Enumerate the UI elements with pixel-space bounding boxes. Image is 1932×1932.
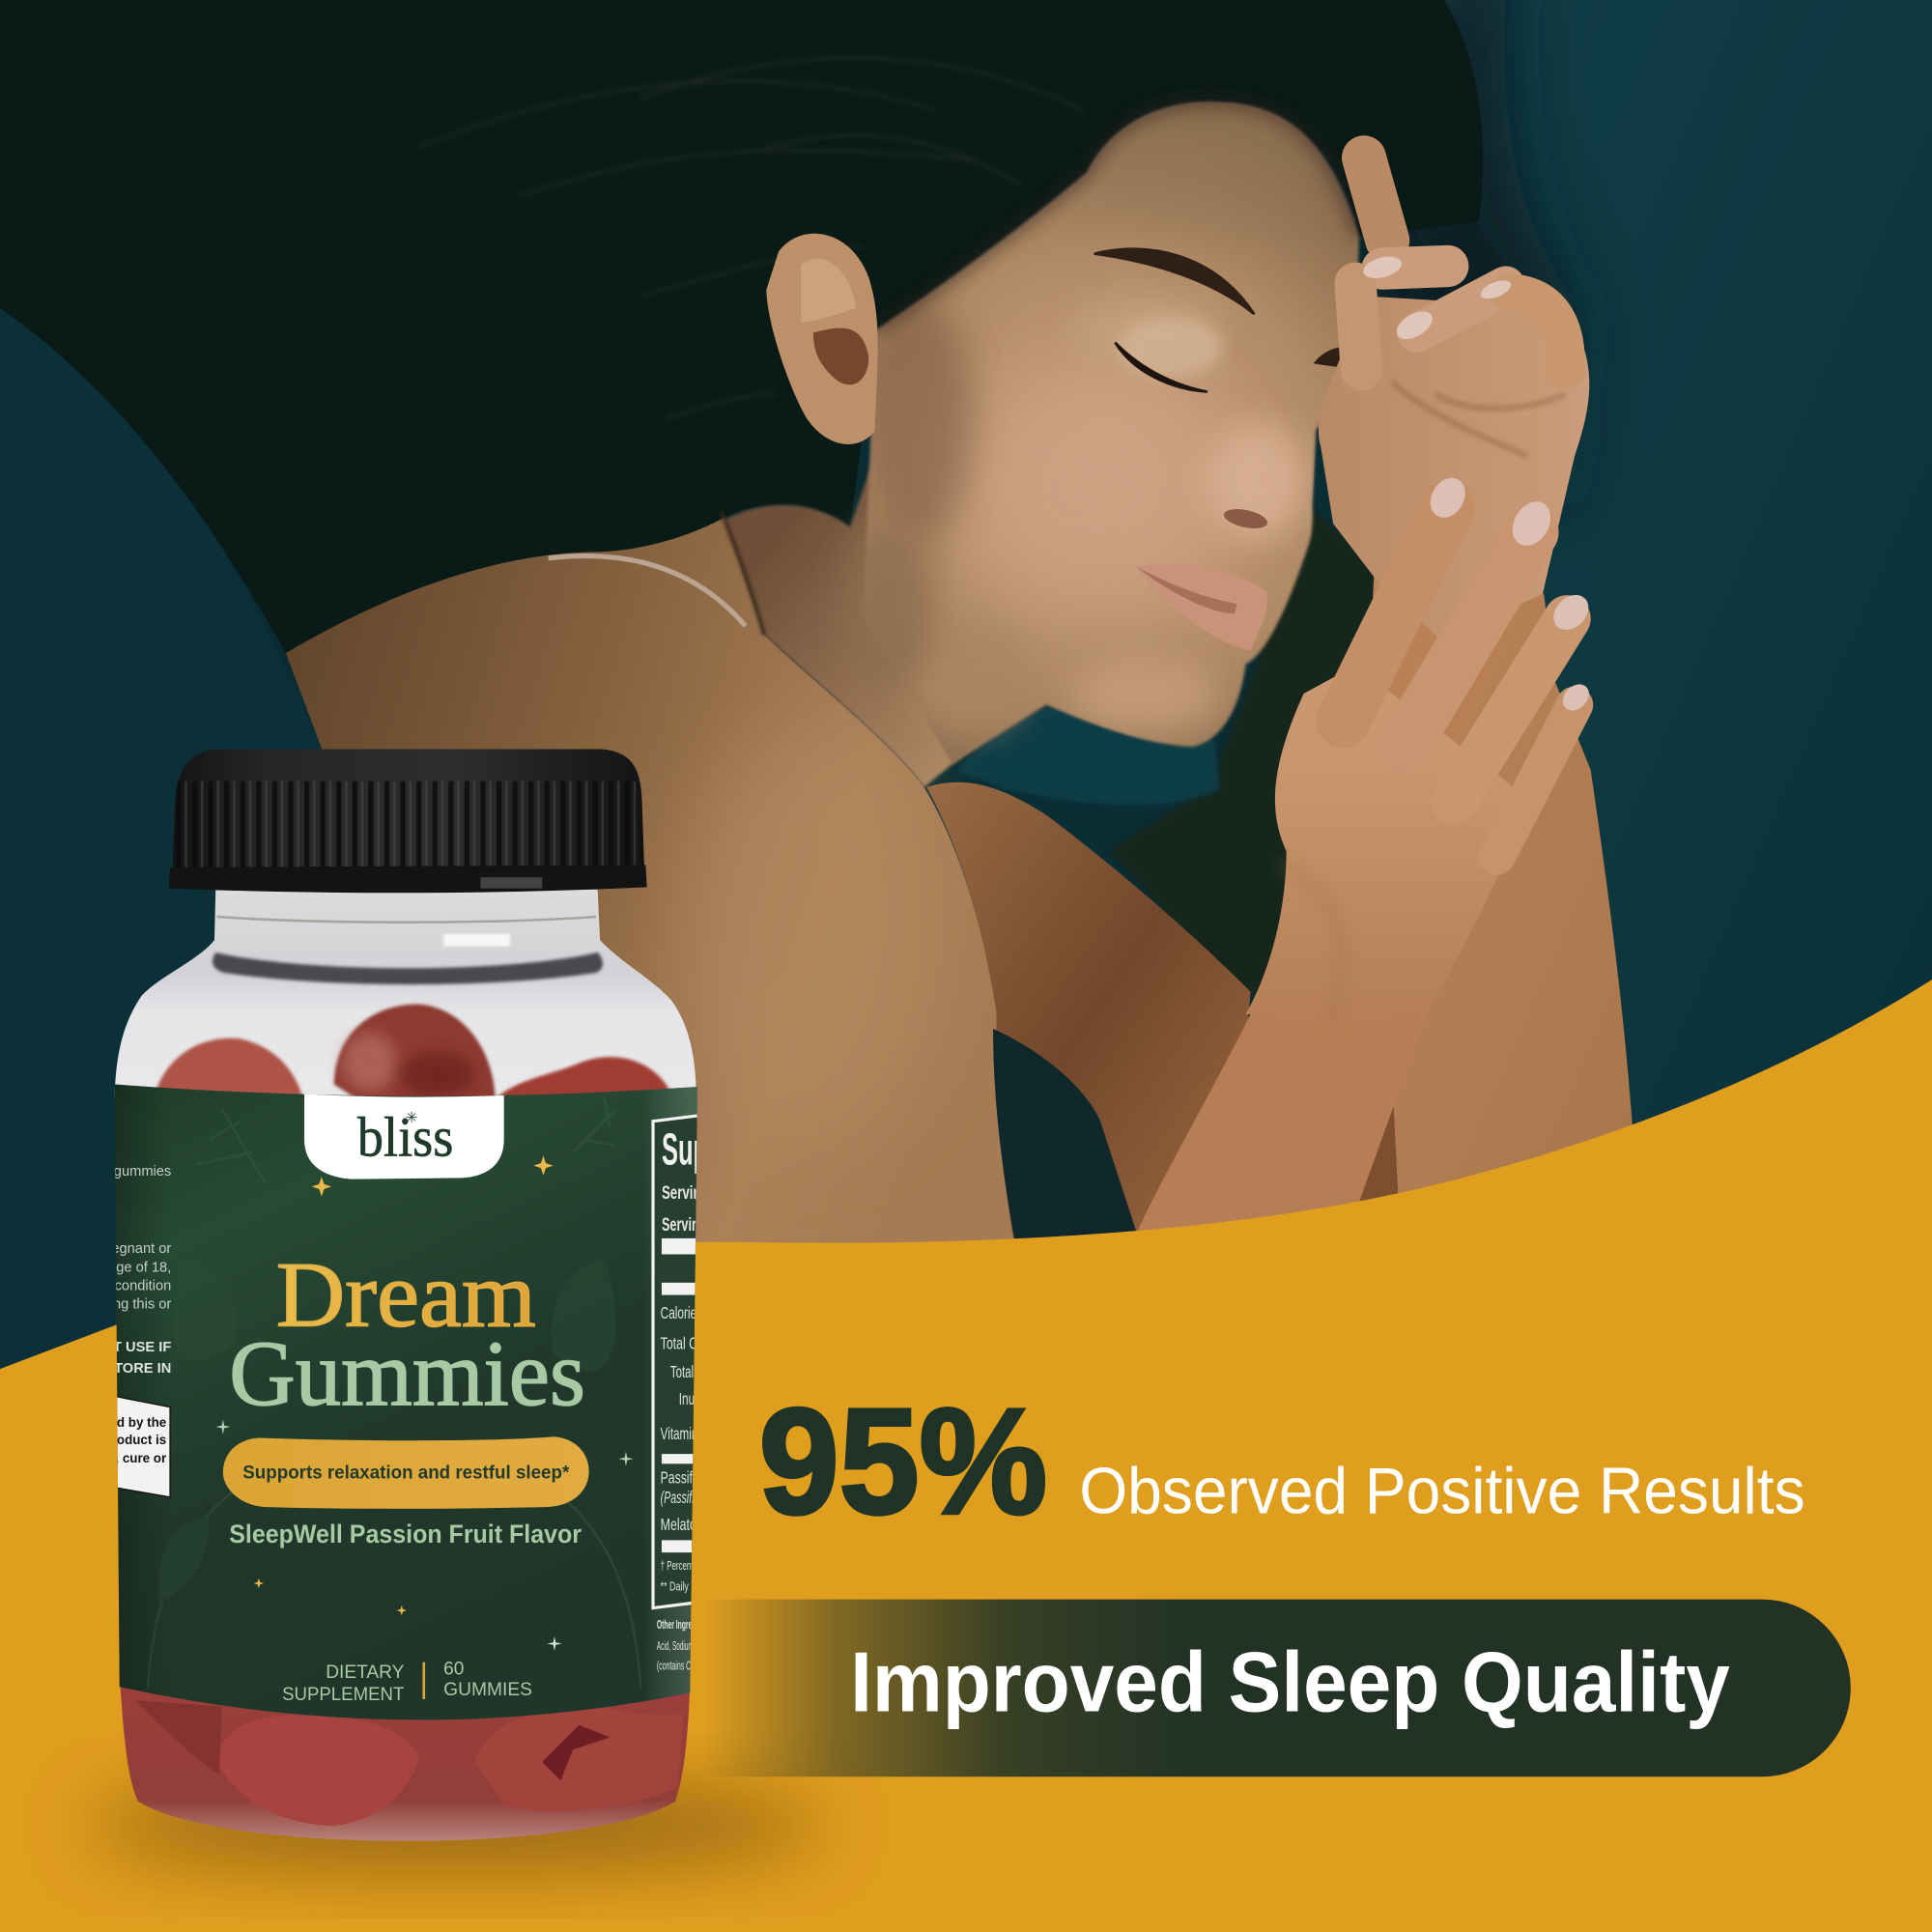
- cap ribs: [174, 781, 643, 867]
- face: [863, 101, 1359, 764]
- teal pillow under chin: [955, 707, 1220, 805]
- cheek and nose shading: [978, 464, 1103, 577]
- shoulder light: [678, 727, 949, 1146]
- tagline pill: Supports relaxation and restful sleep*: [242, 1463, 570, 1484]
- left side statement box: event, cure or: [81, 1451, 166, 1465]
- tagline pill: [223, 1436, 589, 1509]
- neck: [724, 419, 1046, 787]
- jaw to neck blend: [908, 626, 1026, 729]
- product name Dream: Dream: [276, 1242, 536, 1346]
- hair: [0, 0, 1483, 653]
- hair highlights: [419, 58, 1084, 419]
- stat number: 95%: [759, 1377, 1047, 1545]
- gummies count: [443, 1659, 532, 1700]
- left side panel text: you're pregnant or: [57, 1241, 171, 1257]
- left side panel text: fore using this or: [67, 1297, 171, 1313]
- left side panel text: [115, 1165, 171, 1373]
- eye shadow: [1119, 318, 1222, 377]
- lower hand with fingers: [1246, 471, 1596, 1023]
- flavor line: SleepWell Passion Fruit Flavor: [229, 1520, 582, 1548]
- product name Gummies: Gummies: [229, 1321, 585, 1425]
- supplement facts panel: Acid, Sodium Citrate: [657, 1638, 714, 1653]
- eyebrow: [1094, 249, 1254, 314]
- banner: improved sleep quality: [702, 1600, 1851, 1776]
- gummy center: [334, 1005, 496, 1099]
- label leaf decoration: [148, 1096, 640, 1688]
- sparkle stars: [215, 1155, 634, 1651]
- upper hand near forehead: [1319, 157, 1589, 640]
- jar neck and shoulder: [115, 890, 696, 1096]
- supplement facts panel: (contains Coconut): [657, 1658, 714, 1672]
- brand name bliss: bliss: [357, 1105, 453, 1168]
- neck highlight: [443, 934, 510, 947]
- supplement facts panel: Inulin: [679, 1389, 706, 1408]
- supplement facts panel: (Passiflora): [661, 1488, 712, 1507]
- jar base with gummies: [120, 1676, 690, 1841]
- far eyebrow: [1314, 347, 1353, 370]
- supplement facts panel: Melatonin: [661, 1515, 712, 1534]
- supplement facts panel: Supp: [662, 1123, 724, 1174]
- gummies count: 60: [443, 1659, 464, 1679]
- gummies count: GUMMIES: [443, 1680, 532, 1700]
- banner shape: [702, 1600, 1851, 1776]
- left side panel text: ING. STORE IN: [71, 1361, 171, 1377]
- left side panel text: medical condition: [62, 1278, 171, 1293]
- dietary supplement: [282, 1662, 405, 1705]
- forearm rear: [1355, 577, 1633, 1205]
- supplement facts panel: Servings: [662, 1215, 714, 1236]
- divider: [423, 1662, 425, 1699]
- dark sheet below arm: [992, 1023, 1146, 1247]
- soft hairline: [876, 101, 1359, 330]
- left side panel text: . DO NOT USE IF: [59, 1340, 171, 1355]
- supplement facts panel: † Percent Daily: [661, 1558, 713, 1573]
- lips: [1136, 563, 1267, 650]
- neck shadow band: [213, 952, 603, 984]
- forearm front: [1133, 949, 1427, 1239]
- left side statement box: This product is: [73, 1433, 166, 1447]
- supplement facts panel: [651, 1114, 697, 1672]
- bra strap: [549, 556, 746, 626]
- nostril: [1222, 505, 1269, 531]
- supplement facts panel: Total Carb: [661, 1334, 715, 1353]
- face to neck side blend: [845, 518, 934, 690]
- supplement facts panel: ** Daily Value: [661, 1579, 712, 1594]
- soft pillow shadow: [1355, 0, 1577, 518]
- yellow curved wave background: [0, 980, 1932, 1932]
- nails: [1424, 471, 1596, 716]
- stat: 95% observed positive results: [759, 1377, 1805, 1545]
- gummy right: [496, 1057, 671, 1099]
- stat caption: Observed Positive Results: [1079, 1455, 1805, 1527]
- ear: [766, 234, 878, 444]
- right teal pillow: [1417, 0, 1932, 1182]
- cap: [173, 750, 644, 870]
- brand tab: [304, 1094, 504, 1179]
- left pillow: [0, 308, 323, 1380]
- upper back arm: [926, 782, 1251, 1257]
- dark gap between face and arms: [1109, 493, 1405, 998]
- supplement facts panel: Serving Size: [662, 1183, 738, 1204]
- neck ring line: [216, 917, 596, 923]
- left side panel text: (2) gummies: [93, 1164, 171, 1179]
- supplement facts panel: Total Sugars: [670, 1362, 732, 1381]
- gummy left: [154, 1038, 303, 1099]
- nails: [1361, 253, 1514, 345]
- left side panel text: er the age of 18,: [69, 1260, 171, 1275]
- left side statement box: aluated by the: [79, 1415, 166, 1430]
- background photo: woman sleeping on teal pillows: [0, 0, 1932, 1370]
- forearm gap sliver: [1355, 1084, 1399, 1212]
- closed eye lashes: [1115, 343, 1208, 392]
- product bottle: [114, 750, 697, 1841]
- left side statement box: [117, 1396, 171, 1497]
- bottle floor shadow: [86, 1784, 826, 1868]
- icon: sunburst over brand i: ✳: [406, 1110, 417, 1126]
- dietary supplement: SUPPLEMENT: [282, 1685, 405, 1705]
- label: [114, 1084, 697, 1719]
- cap rim: [169, 865, 647, 893]
- supplement facts panel: Calories: [661, 1303, 702, 1322]
- label cylinder shading: [114, 1084, 697, 1700]
- neck tendon line: [721, 511, 764, 635]
- supplement facts panel: Other Ingredients:: [657, 1617, 714, 1632]
- back and shoulder: [286, 518, 1016, 1355]
- supplement facts panel: Passiflora: [661, 1468, 712, 1488]
- banner text: Improved Sleep Quality: [850, 1634, 1730, 1730]
- dietary supplement: DIETARY: [326, 1662, 405, 1683]
- supplement facts panel: Vitamin B6: [661, 1424, 715, 1443]
